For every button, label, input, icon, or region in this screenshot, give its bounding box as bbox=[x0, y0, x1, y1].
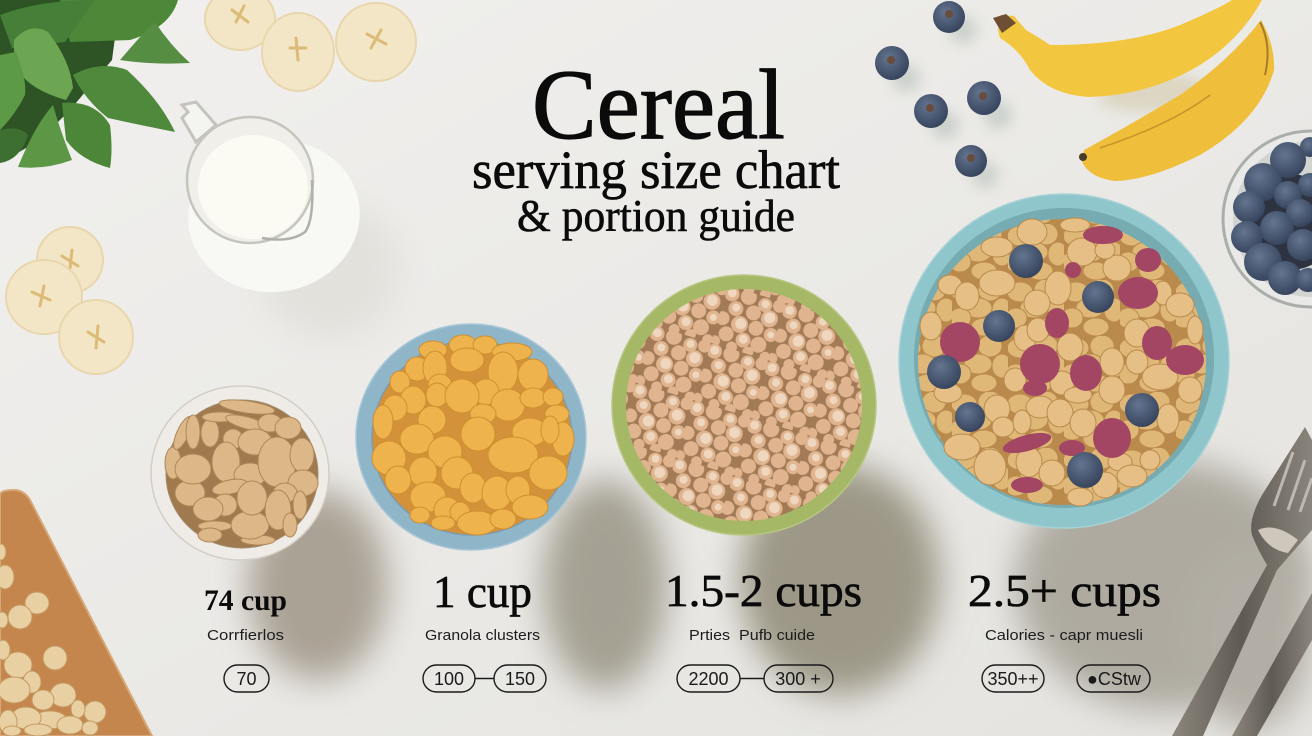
blueberries: scattered bbox=[875, 1, 1012, 188]
bananas bbox=[993, 0, 1274, 181]
fork and knife bbox=[1172, 427, 1312, 736]
calorie pills: ●CStw bbox=[1087, 669, 1142, 689]
mint leaves bbox=[0, 0, 190, 168]
calorie pills bbox=[677, 665, 833, 692]
column 4 label bbox=[968, 565, 1161, 692]
bowl rim bbox=[356, 324, 586, 550]
calorie pills bbox=[423, 665, 546, 692]
bowl 2: granola clusters bowl bbox=[356, 324, 586, 550]
blueberry toppings bbox=[927, 244, 1159, 488]
column 4 label: Calories - capr muesli bbox=[985, 627, 1143, 644]
calorie pill: 70 bbox=[236, 669, 257, 689]
bowl 4: large muesli bowl bbox=[899, 194, 1229, 528]
calorie pills: 150 bbox=[505, 669, 535, 689]
bowl 3: puffs bowl bbox=[612, 275, 876, 535]
flakes bbox=[918, 218, 1206, 506]
calorie pills: 300 + bbox=[775, 669, 821, 689]
cutting board with cereal flakes bbox=[0, 490, 152, 736]
cornflakes bbox=[165, 397, 318, 548]
golden flakes bbox=[372, 335, 574, 535]
column 3 label: Prties Pufb cuide bbox=[689, 627, 815, 644]
calorie pills: 350++ bbox=[987, 669, 1039, 689]
bowl rim bbox=[612, 275, 876, 535]
column 2 label: Granola clusters bbox=[425, 627, 540, 644]
title: serving size chart bbox=[472, 140, 840, 200]
column 3 label bbox=[665, 565, 862, 692]
banana slices: top bbox=[205, 0, 416, 91]
bowl rim bbox=[151, 386, 329, 560]
column 3 label: 1.5-2 cups bbox=[665, 565, 862, 616]
milk pitcher bbox=[178, 102, 370, 303]
column 1 label bbox=[204, 584, 287, 692]
bowl rim bbox=[899, 194, 1229, 528]
puffed cereal bbox=[626, 289, 862, 521]
column 1 label: 74 cup bbox=[204, 584, 287, 617]
column 1 label: Corrfierlos bbox=[207, 627, 284, 644]
calorie pills bbox=[982, 665, 1150, 692]
glass bowl of blueberries bbox=[1223, 131, 1312, 307]
title: Cereal bbox=[532, 49, 785, 160]
red berry pieces bbox=[940, 226, 1204, 493]
soft cast shadows bbox=[248, 200, 1312, 730]
column 2 label: 1 cup bbox=[433, 566, 532, 617]
title: & portion guide bbox=[517, 190, 795, 241]
calorie pills: 100 bbox=[434, 669, 464, 689]
title bbox=[472, 49, 840, 241]
column 4 label: 2.5+ cups bbox=[968, 565, 1161, 616]
calorie pills: 2200 bbox=[688, 669, 729, 689]
column 2 label bbox=[423, 566, 546, 692]
bowl 1: small cornflakes bowl bbox=[151, 386, 329, 560]
banana slices: left bbox=[6, 227, 133, 374]
